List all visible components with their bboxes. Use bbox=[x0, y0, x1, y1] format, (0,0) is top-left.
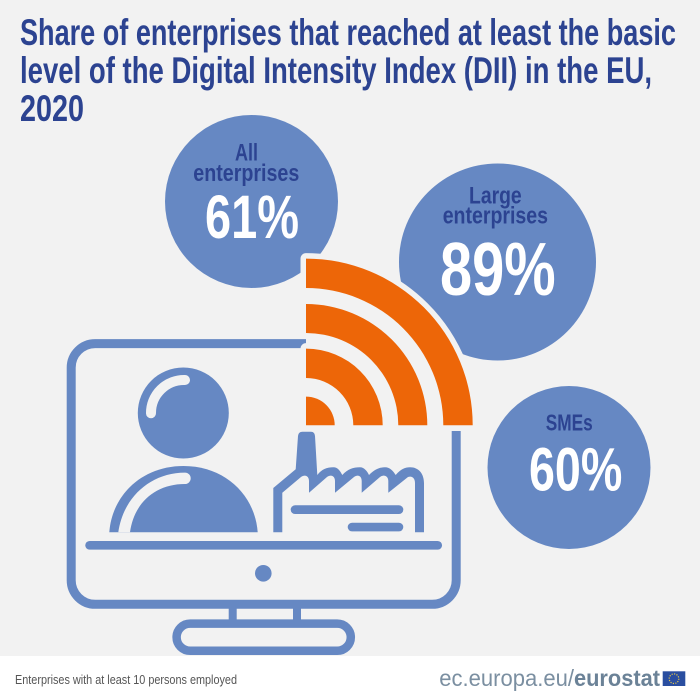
bubble: all enterprises: enterprises bbox=[193, 160, 299, 187]
icon: EU flag bbox=[663, 671, 685, 686]
bubble: SMEs bbox=[488, 386, 650, 549]
bubble: large enterprises: Large bbox=[469, 182, 522, 209]
bubble: all enterprises: 61% bbox=[205, 183, 299, 251]
eurostat logo text: eurostat bbox=[574, 665, 660, 691]
title: 2020 bbox=[20, 88, 84, 129]
bubble: all enterprises bbox=[165, 115, 338, 288]
icon: computer monitor bbox=[71, 344, 456, 651]
title bbox=[20, 12, 676, 129]
footer band bbox=[0, 656, 700, 700]
eurostat logo text: ec.europa.eu/ bbox=[439, 665, 575, 691]
bubble: SMEs: SMEs bbox=[546, 410, 593, 436]
bubble: SMEs: 60% bbox=[529, 436, 622, 504]
icon: factory bbox=[273, 432, 424, 532]
eurostat logo text bbox=[439, 665, 660, 691]
icon: orange wifi signal bbox=[306, 259, 473, 425]
bubble: all enterprises: All bbox=[235, 140, 258, 167]
icon: person bbox=[109, 368, 258, 532]
footnote: Enterprises with at least 10 persons employed bbox=[15, 672, 237, 687]
bubble: large enterprises: enterprises bbox=[443, 202, 548, 229]
bubble: large enterprises bbox=[399, 164, 596, 360]
bubble: large enterprises: 89% bbox=[440, 227, 556, 311]
